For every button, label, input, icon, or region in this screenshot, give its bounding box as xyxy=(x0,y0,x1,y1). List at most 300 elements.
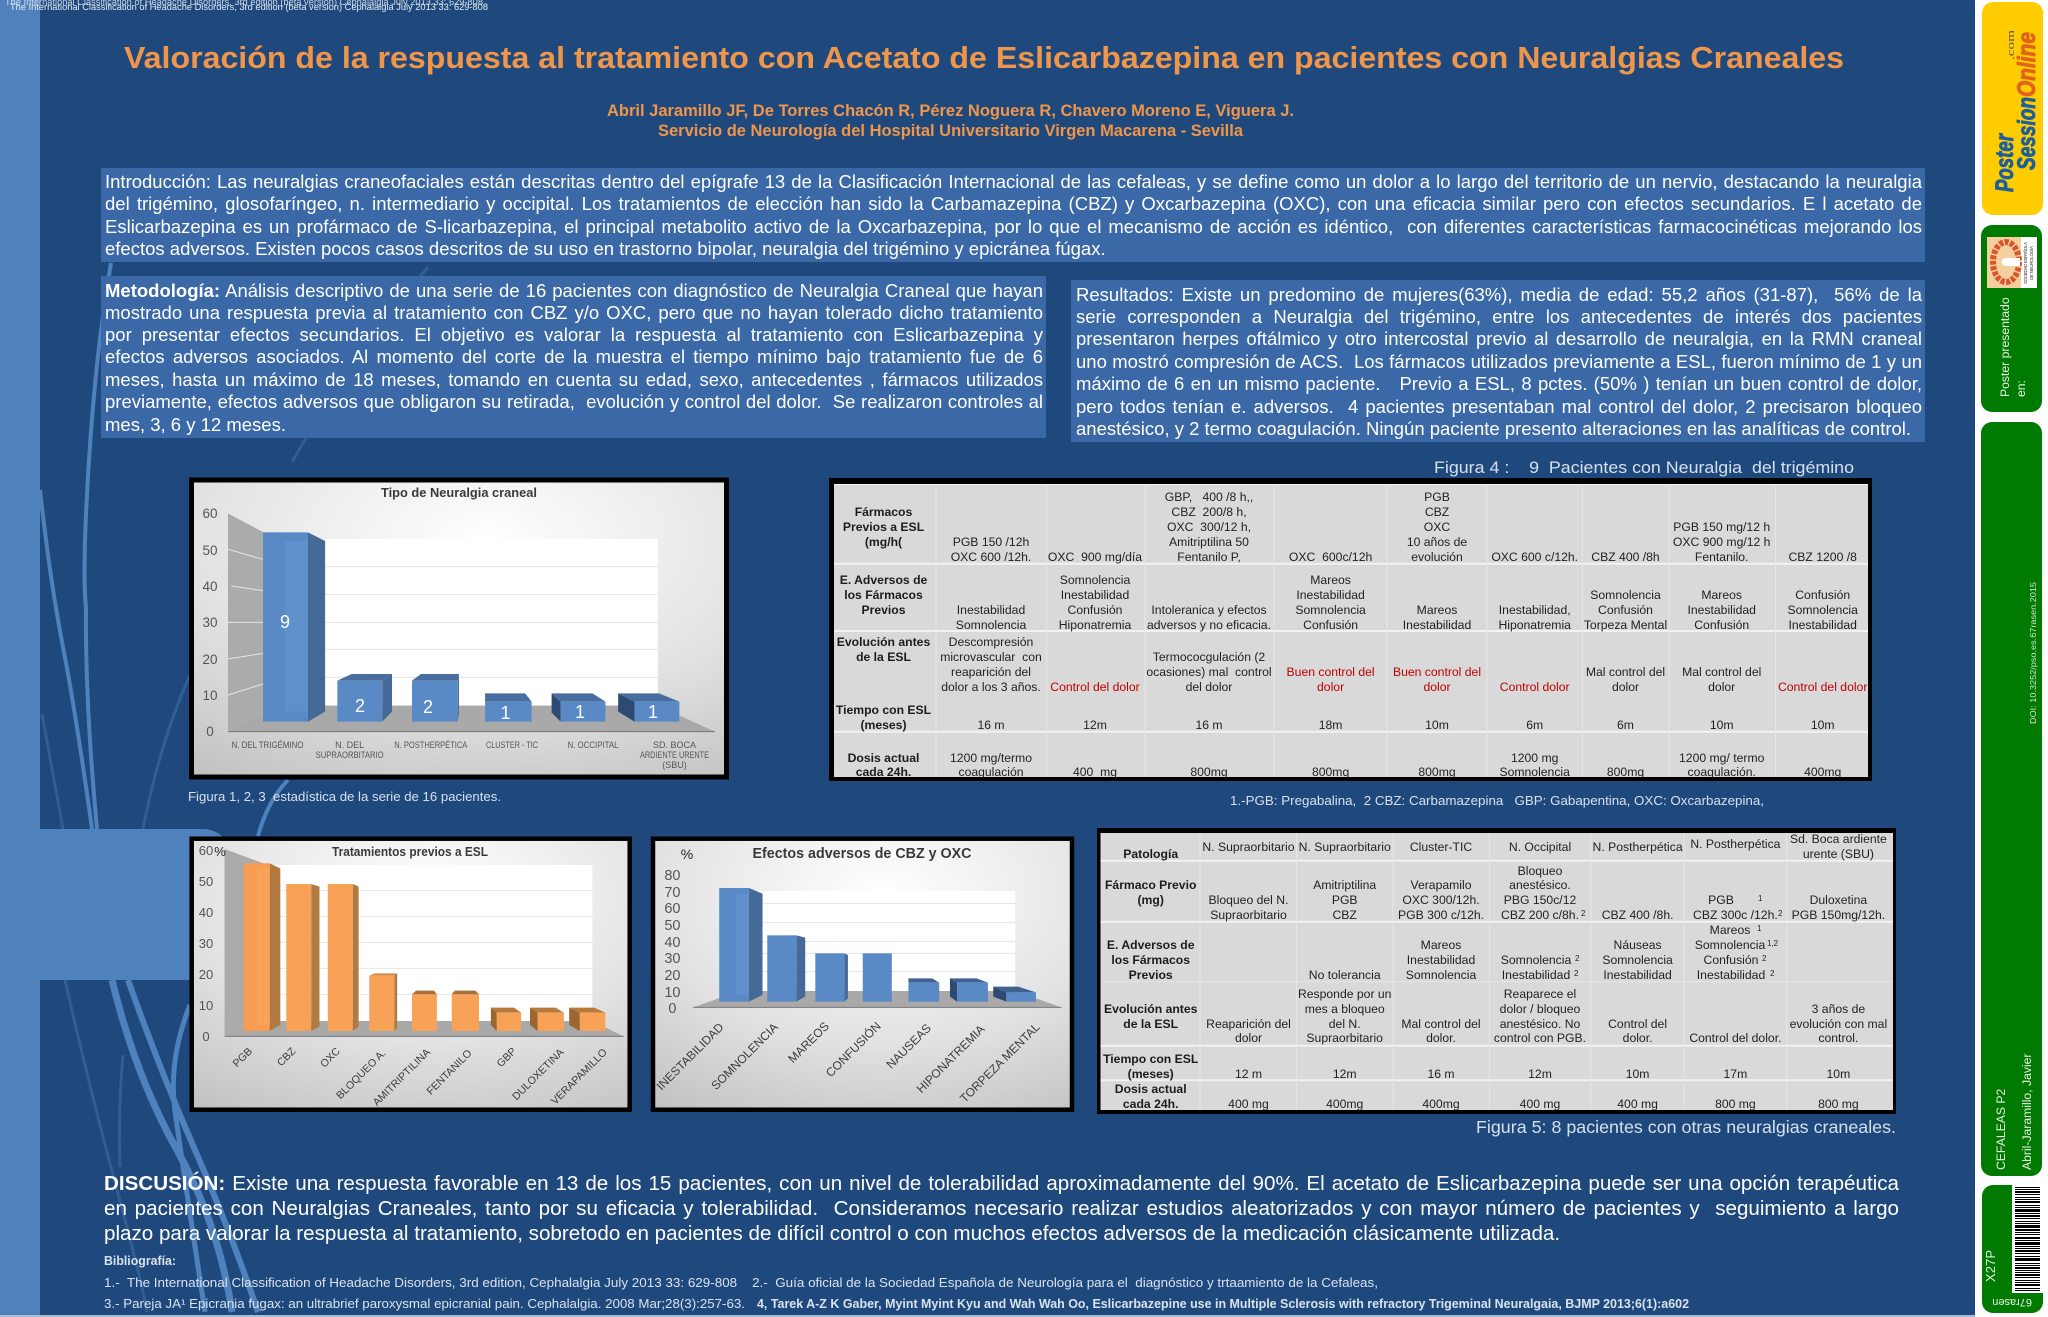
row: evolución antes de la ESL: Control del dolor xyxy=(1778,680,1867,694)
row: evolución antes de la ESL: Buen control del xyxy=(1393,665,1481,679)
row: tiempo con ESL xyxy=(1103,1052,1850,1081)
row: fármacos previos: PGB 150 mg/12 h xyxy=(1673,520,1770,534)
row: efectos adversos: 2 xyxy=(1762,954,1767,963)
row: fármaco previo: Duloxetina xyxy=(1810,893,1867,907)
row: tiempo con ESL: 10m xyxy=(1425,718,1449,732)
sidebar: sesión y autor: CEFALEAS P2 xyxy=(1994,1088,2008,1170)
row: evolución antes de la ESL: Mal control del xyxy=(1401,1017,1481,1031)
table: 8 pacientes con otras neuralgias xyxy=(1097,828,1896,1114)
row: efectos adversos: Inestabilidad xyxy=(1603,968,1672,982)
row: evolución antes de la ESL: Mal control del xyxy=(1682,665,1761,679)
row: evolución antes de la ESL: Supraorbitario xyxy=(1306,1031,1383,1045)
row: fármacos previos: OXC 300/12 h, xyxy=(1167,520,1251,534)
sidebar: código de barras: 67rasen xyxy=(1992,1296,2032,1308)
row: fármaco previo: PGB xyxy=(1332,893,1358,907)
title: Valoración de la respuesta al tratamiento con Acetato de Eslicarbazepina en pacientes con Neuralgias Craneales xyxy=(124,40,1844,75)
row: efectos adversos: 2 xyxy=(1770,969,1775,978)
row: fármaco previo: PGB 300 c/12h. xyxy=(1398,908,1484,922)
y axis labels: 30 xyxy=(664,951,680,967)
row: dosis actual: 400 mg xyxy=(1073,765,1117,779)
row: tiempo con ESL: (meses) xyxy=(1128,1067,1174,1081)
row: efectos adversos: 2 xyxy=(1574,969,1579,978)
row: fármacos previos: Amitriptilina 50 xyxy=(1169,535,1249,549)
row: dosis actual: 400 mg xyxy=(1617,1097,1658,1111)
percent sign: % xyxy=(214,844,226,859)
row: evolución antes de la ESL: Control del xyxy=(1608,1017,1667,1031)
row: fármaco previo: PBG 150c/12 xyxy=(1504,893,1576,907)
row: efectos adversos: E. Adversos de xyxy=(840,573,928,587)
category labels xyxy=(232,740,709,770)
row: evolución antes de la ESL: dolor xyxy=(1612,680,1639,694)
data labels: 2 xyxy=(355,696,365,716)
category labels: N. DEL xyxy=(335,740,364,750)
row: dosis actual: coagulación xyxy=(958,765,1024,779)
row: tiempo con ESL: 10m xyxy=(1811,718,1835,732)
row: efectos adversos: Previos xyxy=(861,603,906,617)
row: evolución antes de la ESL: de la ESL xyxy=(856,650,911,664)
sidebar: sesión y autor xyxy=(1981,422,2042,1176)
panel: discusión: en pacientes con Neuralgias Craneales, tanto por su eficacia y tolerabilidad. Consideramos necesario realizar estudios aleatorizados y con mayor número de pacientes y seguimiento a largo xyxy=(104,1197,1899,1220)
y axis labels: 10 xyxy=(199,998,213,1013)
row: efectos adversos: Mareos xyxy=(1710,923,1750,937)
authors and institution xyxy=(607,101,1294,140)
category labels: OXC xyxy=(318,1045,343,1070)
icon: sociedad logo: SOCIEDAD ESPAÑOLA xyxy=(2022,242,2028,284)
y axis labels: 0 xyxy=(206,724,214,739)
y axis labels: 20 xyxy=(199,967,213,982)
category labels: FENTANILO xyxy=(424,1047,474,1097)
row: evolución antes de la ESL: Control del dolor xyxy=(1050,680,1140,694)
panel: metodología: efectos adversos asociados. Al momento del corte de la muestra el tiempo mínimo bajo tratamiento fue de 6 xyxy=(105,346,1043,367)
category labels: CONFUSIÓN xyxy=(822,1018,884,1080)
row: dosis actual: Somnolencia xyxy=(1499,765,1570,779)
row: tiempo con ESL: 12 m xyxy=(1235,1067,1262,1081)
y axis labels: 0 xyxy=(668,1001,676,1017)
y axis labels: 30 xyxy=(199,936,213,951)
row: fármaco previo xyxy=(1105,864,1885,922)
sidebar: poster presentado en: Poster presentado xyxy=(1998,297,2012,397)
row: efectos adversos: Inestabilidad xyxy=(1296,588,1365,602)
row: dosis actual: Dosis actual xyxy=(1115,1082,1187,1096)
y axis labels xyxy=(199,843,213,1044)
category labels: INESTABILIDAD xyxy=(654,1020,727,1093)
row: efectos adversos: Somnolencia xyxy=(1590,588,1661,602)
row: fármacos previos: CBZ xyxy=(1425,505,1450,519)
data labels xyxy=(280,612,658,723)
row: efectos adversos: 1,2 xyxy=(1767,939,1779,948)
category labels: HIPONATREMIA xyxy=(914,1022,988,1096)
row: tiempo con ESL: 16 m xyxy=(1195,718,1223,732)
panel: introducción: del trigémino, glosofaríngeo, n. intermediario y occipital. Los tratamientos de elección han sido la Carbamazepina (CBZ) y Oxcarbazepina (OXC), con una eficacia similar pero con efectos secundarios. E l acetato de xyxy=(105,193,1922,214)
row: dosis actual: 800 mg xyxy=(1715,1097,1756,1111)
panel: resultados: máximo de 6 en un mismo paciente. Previo a ESL, 8 pctes. (50% ) tenían un buen control de dolor, xyxy=(1076,373,1922,394)
panel: introducción: efectos adversos. Existen pocos casos descritos de su uso en trastorno bipolar, neuralgia del trigémino y epicránea fúgax. xyxy=(105,238,1106,259)
row: fármacos previos: Fentanilo P, xyxy=(1177,550,1241,564)
row: tiempo con ESL: 17m xyxy=(1724,1067,1747,1081)
row: dosis actual xyxy=(848,751,1841,779)
row: fármacos previos: OXC 900 mg/día xyxy=(1048,550,1142,564)
panel: resultados: uno mostró compresión de ACS. Los fármacos utilizados previamente a ESL, fueron mínimo de 1 y un xyxy=(1076,351,1922,372)
category labels: TORPEZA MENTAL xyxy=(957,1020,1043,1106)
row: efectos adversos: Inestabilidad xyxy=(1502,968,1570,982)
row: fármaco previo: CBZ 400 /8h. xyxy=(1602,908,1674,922)
table: 9 pacientes con neuralgia del trigémino xyxy=(829,478,1872,781)
row: fármacos previos: GBP, 400 /8 h,, xyxy=(1165,490,1253,504)
category labels: SOMNOLENCIA xyxy=(708,1020,781,1093)
category labels: MAREOS xyxy=(785,1019,832,1066)
category labels: NAUSEAS xyxy=(883,1021,934,1072)
authors and institution: Servicio de Neurología del Hospital Universitario Virgen Macarena - Sevilla xyxy=(658,121,1244,140)
row: efectos adversos: Somnolencia xyxy=(1501,953,1571,967)
category labels: PGB xyxy=(231,1045,255,1070)
row: fármaco previo: OXC 300/12h. xyxy=(1402,893,1480,907)
row: evolución antes de la ESL: Termococgulación (2 xyxy=(1153,650,1265,664)
row: dosis actual: cada 24h. xyxy=(856,765,911,779)
row: efectos adversos: Somnolencia xyxy=(1406,968,1476,982)
row: efectos adversos: Torpeza Mental xyxy=(1584,618,1667,632)
panel: introducción: Introducción: Las neuralgias craneofaciales están descritas dentro del epígrafe 13 de la Clasificación Internacional de las cefaleas, y se define como un dolor a lo largo del territorio de un nervio, destacando la neuralgia xyxy=(105,171,1922,192)
row: efectos adversos: Hiponatremia xyxy=(1498,618,1571,632)
sidebar: código de barras xyxy=(1982,1185,2043,1313)
row: tiempo con ESL: 16 m xyxy=(1427,1067,1455,1081)
data labels: 1 xyxy=(500,703,511,723)
panel: introducción: Eslicarbazepina es un profármaco de S-licarbazepina, el principal metabolito activo de la Oxcarbazepina, por lo que el mecanismo de acción es idéntico, con diferentes características farmacocinéticas mejorando los xyxy=(105,216,1922,237)
panel: resultados xyxy=(1071,280,1925,442)
row: efectos adversos: Somnolencia xyxy=(1695,938,1765,952)
row: fármacos previos: Fentanilo. xyxy=(1695,550,1748,564)
bibliografía: Bibliografía: xyxy=(104,1254,176,1268)
row: dosis actual: 400mg xyxy=(1326,1097,1363,1111)
row: efectos adversos: Somnolencia xyxy=(1060,573,1130,587)
category labels: DULOXETINA xyxy=(510,1046,567,1103)
row: evolución antes de la ESL: Reaparece el xyxy=(1504,987,1576,1001)
row: tiempo con ESL: 18m xyxy=(1319,718,1342,732)
row: efectos adversos: Inestabilidad xyxy=(1407,953,1475,967)
sidebar: poster presentado en: en: xyxy=(2014,380,2028,397)
category labels: BLOQUEO A. xyxy=(334,1047,388,1102)
row: fármaco previo: Supraorbitario xyxy=(1210,908,1287,922)
row: tiempo con ESL: Tiempo con ESL xyxy=(1103,1052,1199,1066)
panel: resultados: pero todos tenían e. adversos. 4 pacientes presentaban mal control del dolor, 2 precisaron bloqueo xyxy=(1076,396,1922,417)
row: tiempo con ESL: 12m xyxy=(1083,718,1107,732)
sidebar: poster presentado en xyxy=(1981,225,2042,412)
row: tiempo con ESL xyxy=(836,703,1835,732)
row: efectos adversos: Náuseas xyxy=(1614,938,1662,952)
y axis labels: 30 xyxy=(202,615,218,630)
row: tiempo con ESL: 12m xyxy=(1333,1067,1357,1081)
row: efectos adversos: Mareos xyxy=(1701,588,1742,602)
panel: metodología: meses, hasta un máximo de 18 meses, tomando en cuenta su edad, sexo, antecedentes , fármacos utilizados xyxy=(105,369,1043,390)
row: evolución antes de la ESL: de la ESL xyxy=(1123,1017,1179,1031)
row: efectos adversos: Somnolencia xyxy=(1602,953,1673,967)
row: patología: Cluster-TIC xyxy=(1410,840,1472,854)
row: fármacos previos: CBZ 200/8 h, xyxy=(1171,505,1247,519)
row: dosis actual: 800 mg xyxy=(1818,1097,1859,1111)
row: efectos adversos: 2 xyxy=(1575,954,1580,963)
row: fármaco previo: Amitriptilina xyxy=(1313,878,1376,892)
row: dosis actual: 1200 mg/termo xyxy=(950,751,1032,765)
row: evolución antes de la ESL: Buen control del xyxy=(1287,665,1375,679)
row: dosis actual: cada 24h. xyxy=(1123,1097,1178,1111)
row: evolución antes de la ESL: dolor xyxy=(1423,680,1451,694)
data labels: 1 xyxy=(575,702,585,722)
bibliografía: 3.- Pareja JA¹ Epicrania fugax: an ultrabrief paroxysmal epicranial pain. Cephalalgia. 2008 Mar;28(3):257-63. xyxy=(104,1297,745,1311)
row: evolución antes de la ESL: control con PGB. xyxy=(1494,1031,1586,1045)
sidebar: PosterSessionOnline logo: Online xyxy=(2013,32,2041,97)
row: efectos adversos: Inestabilidad xyxy=(1687,603,1756,617)
row: fármacos previos: 10 años de xyxy=(1407,535,1467,549)
chart title: Tratamientos previos a ESL xyxy=(332,844,488,859)
chart title: Efectos adversos de CBZ y OXC xyxy=(752,846,972,862)
panel: metodología: previamente, efectos adversos que obligaron su retirada, evolución y control del dolor. Se realizaron controles al xyxy=(105,391,1043,412)
row: fármacos previos: Previos a ESL xyxy=(843,520,925,534)
y axis labels: 40 xyxy=(664,935,680,951)
row: fármacos previos: OXC 600 c/12h. xyxy=(1491,550,1578,564)
row: patología: N. Postherpética xyxy=(1690,837,1781,851)
sidebar: código de barras: X27P xyxy=(1983,1250,1998,1282)
panel: metodología: Metodología: Análisis descriptivo de una serie de 16 pacientes con diagnóstico de Neuralgia Craneal que hayan xyxy=(105,280,1043,301)
row: dosis actual xyxy=(1115,1082,1859,1111)
category labels: N. OCCIPITAL xyxy=(568,740,618,750)
row: evolución antes de la ESL: del N. xyxy=(1329,1017,1361,1031)
row: evolución antes de la ESL: anestésico. No xyxy=(1500,1017,1581,1031)
row: evolución antes de la ESL: dolor / bloqueo xyxy=(1500,1002,1581,1016)
row: fármacos previos: CBZ 1200 /8 xyxy=(1788,550,1857,564)
sidebar: PosterSessionOnline logo: Session xyxy=(2013,97,2041,170)
y axis labels: 40 xyxy=(199,905,213,920)
row: efectos adversos: E. Adversos de xyxy=(1107,938,1195,952)
row: evolución antes de la ESL: dolor xyxy=(1317,680,1344,694)
row: efectos adversos: Inestabilidad xyxy=(1403,618,1471,632)
row: fármacos previos: OXC 600c/12h xyxy=(1289,550,1372,564)
row: efectos adversos: Inestabilidad xyxy=(1697,968,1765,982)
panel: resultados: Resultados: Existe un predomino de mujeres(63%), media de edad: 55,2 años (31-87), 56% de la xyxy=(1076,284,1922,305)
category labels: N. POSTHERPÉTICA xyxy=(394,740,467,750)
row: patología: urente (SBU) xyxy=(1803,847,1874,861)
panel: metodología xyxy=(101,276,1046,438)
row: tiempo con ESL: 6m xyxy=(1617,718,1634,732)
row: efectos adversos: Somnolencia xyxy=(1295,603,1366,617)
row: evolución antes de la ESL: control. xyxy=(1818,1031,1858,1045)
chart: Tratamientos previos a ESL xyxy=(192,839,630,1110)
category labels: AMITRIPTILINA xyxy=(371,1046,434,1109)
data labels: 1 xyxy=(648,702,658,722)
caption: figuras 1, 2, 3: Figura 1, 2, 3 estadística de la serie de 16 pacientes. xyxy=(188,789,501,804)
row: fármacos previos: Fármacos xyxy=(855,505,913,519)
row: fármaco previo: PGB xyxy=(1708,893,1734,907)
row: dosis actual: 400mg xyxy=(1804,765,1841,779)
category labels: CBZ xyxy=(275,1045,299,1069)
sidebar: PosterSessionOnline logo: Poster xyxy=(1991,133,2019,192)
y axis labels: 10 xyxy=(202,688,218,703)
row: efectos adversos: Inestabilidad xyxy=(1788,618,1857,632)
panel: discusión xyxy=(104,1172,1899,1245)
chart: Tipo de Neuralgia craneal xyxy=(192,480,726,777)
bibliografía: 4, Tarek A-Z K Gaber, Myint Myint Kyu and Wah Wah Oo, Eslicarbazepine use in Multiple Sclerosis with refractory Trigeminal Neuralgaia, BJMP 2013;6(1):a602 xyxy=(757,1297,1689,1311)
sidebar: PosterSessionOnline logo: .com xyxy=(2005,29,2017,60)
row: evolución antes de la ESL: mes a bloqueo xyxy=(1305,1002,1385,1016)
row: tiempo con ESL: 12m xyxy=(1528,1067,1552,1081)
row: tiempo con ESL: 6m xyxy=(1526,718,1543,732)
category labels: N. DEL TRIGÉMINO xyxy=(232,740,304,750)
row: efectos adversos: los Fármacos xyxy=(844,588,923,602)
row: dosis actual: 400mg xyxy=(1422,1097,1460,1111)
row: efectos adversos: 1 xyxy=(1757,924,1762,933)
authors and institution: Abril Jaramillo JF, De Torres Chacón R, Pérez Noguera R, Chavero Moreno E, Viguera J. xyxy=(607,101,1294,120)
y axis labels: 20 xyxy=(664,968,680,984)
row: fármaco previo: CBZ 200 c/8h. xyxy=(1501,908,1579,922)
icon: sociedad logo: DE NEUROLOGÍA xyxy=(2028,246,2034,280)
row: dosis actual: 800mg xyxy=(1190,765,1228,779)
row: evolución antes de la ESL: del dolor xyxy=(1186,680,1232,694)
row: fármacos previos: OXC 900 mg/12 h xyxy=(1673,535,1770,549)
category labels: (SBU) xyxy=(662,760,687,770)
y axis labels: 60 xyxy=(664,901,680,917)
bibliografía xyxy=(104,1254,1689,1311)
table footnote: abreviaturas: 1.-PGB: Pregabalina, 2 CBZ: Carbamazepina GBP: Gabapentina, OXC: Oxcarbazepina, xyxy=(1230,793,1764,808)
row: patología: N. Postherpética xyxy=(1593,840,1683,854)
row: evolución antes de la ESL: ocasiones) mal control xyxy=(1146,665,1272,679)
category labels: GBP xyxy=(495,1045,519,1070)
running header citation: The International Classification of Headache Disorders, 3rd edition (beta version) Cephalalgia July 2013 33: 629-808 xyxy=(10,2,488,13)
row: efectos adversos: No tolerancia xyxy=(1309,968,1381,982)
row: fármacos previos: CBZ 400 /8h xyxy=(1591,550,1660,564)
row: dosis actual: 800mg xyxy=(1607,765,1644,779)
panel: metodología: mostrado una respuesta previa al tratamiento con CBZ y/o OXC, pero que no hayan tolerado dicho tratamiento xyxy=(105,302,1043,323)
row: patología: N. Supraorbitario xyxy=(1202,840,1295,854)
row: tiempo con ESL: 10m xyxy=(1626,1067,1649,1081)
row: evolución antes de la ESL: reaparición del xyxy=(951,665,1031,679)
category labels: SUPRAORBITARIO xyxy=(316,750,384,760)
panel: metodología: mes, 3, 6 y 12 meses. xyxy=(105,414,286,435)
sidebar: PosterSessionOnline logo xyxy=(1982,2,2043,215)
row: fármaco previo: Bloqueo del N. xyxy=(1209,893,1288,907)
sidebar: sesión y autor: DOI: 10.3252/pso.es.67rasen.2015 xyxy=(2029,581,2038,724)
row: efectos adversos: Previos xyxy=(1129,968,1173,982)
row: efectos adversos: Mareos xyxy=(1421,938,1461,952)
row: tiempo con ESL: Tiempo con ESL xyxy=(836,703,932,717)
y axis labels xyxy=(202,506,218,739)
row: fármaco previo: 2 xyxy=(1778,909,1783,918)
row: fármacos previos: OXC 600 /12h. xyxy=(951,550,1031,564)
sidebar: sesión y autor: Abril-Jaramillo, Javier xyxy=(2020,1054,2034,1170)
row: efectos adversos: Mareos xyxy=(1417,603,1457,617)
row: patología: Sd. Boca ardiente xyxy=(1790,832,1887,846)
row: efectos adversos: Intoleranica y efectos xyxy=(1151,603,1267,617)
row: dosis actual: 800mg xyxy=(1418,765,1456,779)
row: dosis actual: 400 mg xyxy=(1228,1097,1269,1111)
row: patología: Patología xyxy=(1123,847,1178,861)
row: efectos adversos: Mareos xyxy=(1310,573,1351,587)
row: dosis actual: 1200 mg xyxy=(1511,751,1558,765)
row: fármacos previos: evolución xyxy=(1411,550,1463,564)
bibliografía: 1.- The International Classification of Headache Disorders, 3rd edition, Cephalalgia July 2013 33: 629-808 2.- Guía oficial de la Sociedad Española de Neurología para el diagnóstico y trtaamiento de la Cefaleas, xyxy=(104,1276,1378,1290)
y axis labels: 10 xyxy=(664,985,680,1001)
data labels: 2 xyxy=(423,697,433,717)
row: efectos adversos: Inestabilidad xyxy=(957,603,1025,617)
row: tiempo con ESL: 10m xyxy=(1710,718,1734,732)
row: dosis actual: Dosis actual xyxy=(848,751,919,765)
category labels: CLUSTER - TIC xyxy=(486,740,538,750)
category labels: SD. BOCA xyxy=(653,740,696,750)
row: evolución antes de la ESL: Evolución antes xyxy=(1104,1002,1198,1016)
y axis labels: 20 xyxy=(202,652,218,667)
row: efectos adversos: Confusión xyxy=(1068,603,1122,617)
panel: resultados: anestésico, y 2 termo coagulación. Ningún paciente presento alteraciones en las analíticas de control. xyxy=(1076,418,1911,439)
row: fármacos previos: PGB xyxy=(1424,490,1450,504)
row: fármacos previos: OXC xyxy=(1424,520,1450,534)
chart: Efectos adversos de CBZ y OXC xyxy=(653,839,1072,1110)
row: fármaco previo: Fármaco Previo xyxy=(1105,878,1196,892)
row: evolución antes de la ESL: dolor a los 3 años. xyxy=(941,680,1041,694)
y axis labels: 80 xyxy=(664,868,680,884)
row: tiempo con ESL: 16 m xyxy=(977,718,1005,732)
y axis labels: 70 xyxy=(664,885,680,901)
row: tiempo con ESL: 10m xyxy=(1827,1067,1850,1081)
row: evolución antes de la ESL: dolor. xyxy=(1623,1031,1653,1045)
row: evolución antes de la ESL xyxy=(837,635,1867,694)
row: evolución antes de la ESL: evolución con mal xyxy=(1790,1017,1887,1031)
data labels: 9 xyxy=(280,612,290,632)
caption: figura 5: Figura 5: 8 pacientes con otras neuralgias craneales. xyxy=(1476,1117,1896,1137)
row: efectos adversos: Inestabilidad xyxy=(1061,588,1129,602)
row: fármaco previo: CBZ xyxy=(1333,908,1357,922)
row: evolución antes de la ESL: dolor. xyxy=(1426,1031,1456,1045)
row: evolución antes de la ESL: microvascular con xyxy=(940,650,1042,664)
row: evolución antes de la ESL xyxy=(1104,987,1887,1045)
row: fármaco previo: anestésico. xyxy=(1509,878,1571,892)
row: fármaco previo: Bloqueo xyxy=(1518,864,1563,878)
y axis labels: 50 xyxy=(199,874,213,889)
category labels xyxy=(231,1045,610,1109)
percent sign: % xyxy=(681,846,693,862)
row: fármaco previo: Verapamilo xyxy=(1411,878,1472,892)
row: fármaco previo: (mg) xyxy=(1137,893,1164,907)
row: evolución antes de la ESL: 3 años de xyxy=(1812,1002,1865,1016)
panel: introducción xyxy=(101,168,1925,262)
row: fármaco previo: 1 xyxy=(1758,894,1763,903)
row: efectos adversos: Confusión xyxy=(1704,953,1758,967)
row: evolución antes de la ESL: dolor xyxy=(1708,680,1735,694)
y axis labels: 40 xyxy=(202,579,218,594)
category labels xyxy=(654,1018,1043,1106)
row: evolución antes de la ESL: Control dolor xyxy=(1500,680,1570,694)
y axis labels: 60 xyxy=(199,843,213,858)
row: evolución antes de la ESL: Descompresión xyxy=(949,635,1033,649)
row: fármacos previos: PGB 150 /12h xyxy=(953,535,1029,549)
row: dosis actual: 1200 mg/ termo xyxy=(1679,751,1765,765)
category labels: ARDIENTE URENTE xyxy=(640,750,709,760)
row: efectos adversos: Somnolencia xyxy=(956,618,1026,632)
panel: resultados: serie corresponden a Neuralgia del trigémino, entre los antecedentes de interés dos pacientes xyxy=(1076,306,1922,327)
row: efectos adversos: Confusión xyxy=(1303,618,1358,632)
row: evolución antes de la ESL: dolor xyxy=(1235,1031,1262,1045)
row: efectos adversos: los Fármacos xyxy=(1111,953,1190,967)
y axis labels: 0 xyxy=(202,1029,210,1044)
caption: figura 4: Figura 4 : 9 Pacientes con Neuralgia del trigémino xyxy=(1434,458,1854,477)
y axis labels: 60 xyxy=(202,506,218,521)
panel: resultados: presentaron herpes oftálmico y otro intercostal previo al desarrollo de neuralgia, en la RMN craneal xyxy=(1076,328,1922,349)
icon: sociedad logo xyxy=(1987,237,2037,288)
row: fármaco previo: 2 xyxy=(1581,909,1586,918)
row: evolución antes de la ESL: Mal control del xyxy=(1586,665,1665,679)
row: efectos adversos: Hiponatremia xyxy=(1059,618,1131,632)
row: efectos adversos xyxy=(840,573,1858,632)
panel: metodología: por presentar efectos secundarios. El objetivo es valorar la respuesta al tratamiento con Eslicarbazepina y xyxy=(105,324,1043,345)
row: fármacos previos xyxy=(843,490,1857,564)
row: evolución antes de la ESL: Evolución antes xyxy=(837,635,930,649)
row: efectos adversos: Confusión xyxy=(1795,588,1850,602)
